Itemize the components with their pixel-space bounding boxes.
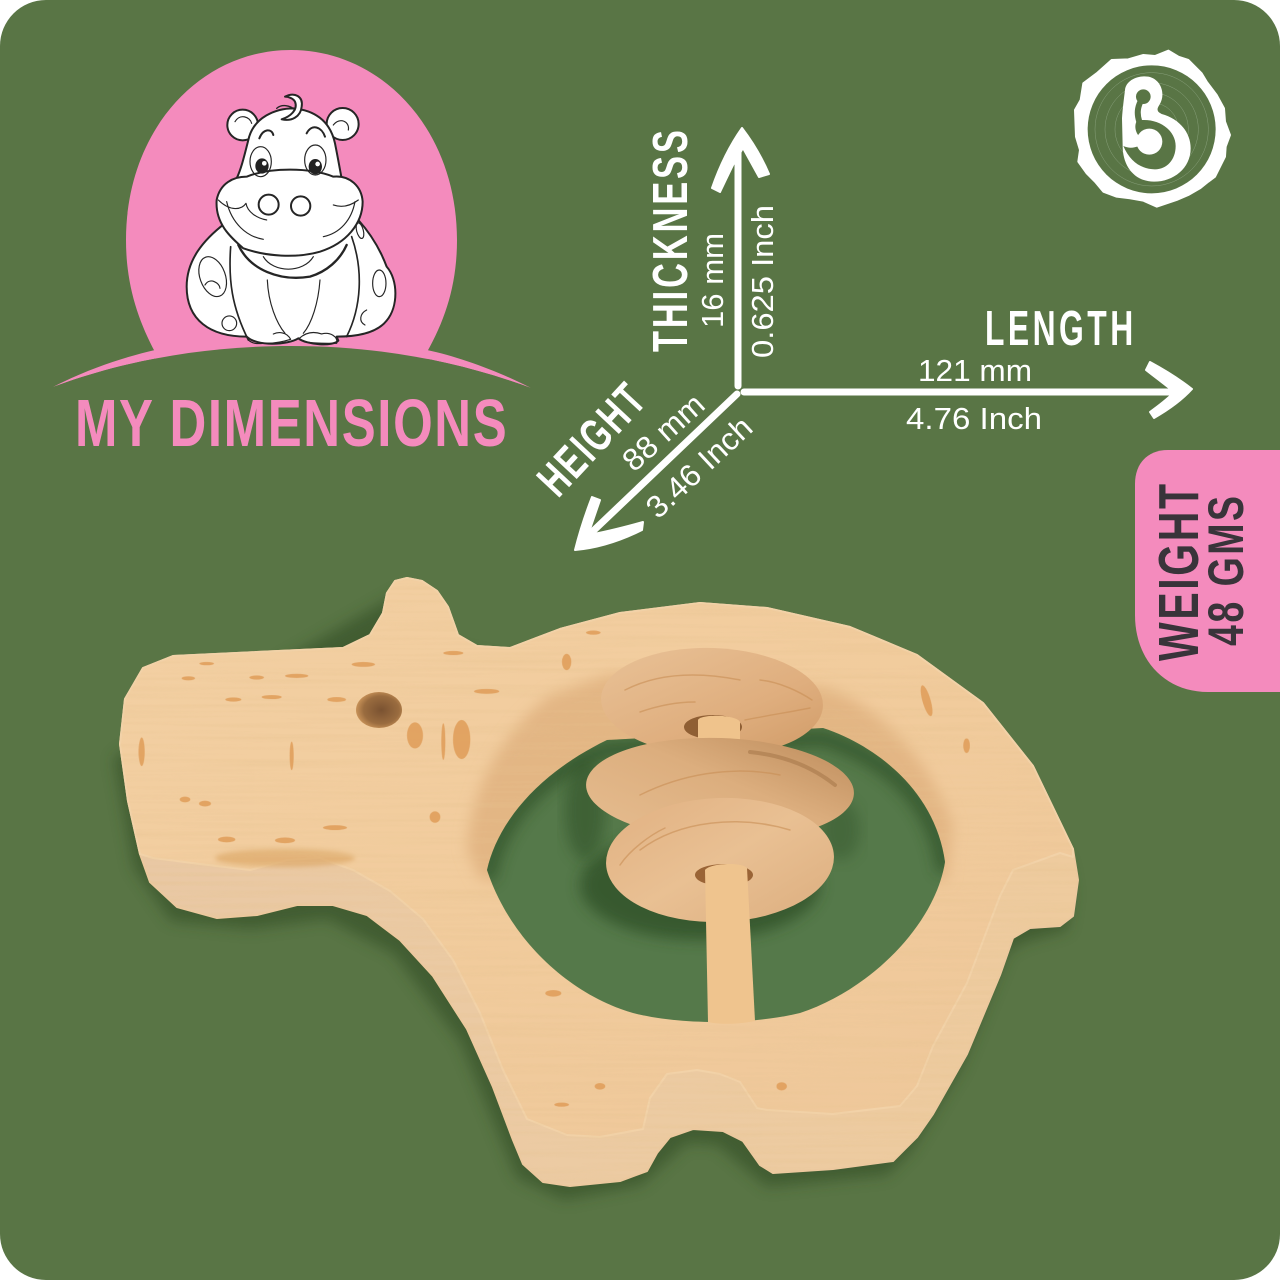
height mm: 88 mm <box>615 387 712 478</box>
upper rod stub <box>698 716 740 745</box>
logo <box>1075 51 1230 207</box>
length label: LENGTH <box>985 301 1133 356</box>
toy wide shadow <box>114 592 1072 1200</box>
green ground <box>53 346 531 394</box>
weight label: WEIGHT <box>1146 484 1211 661</box>
lower rod <box>705 864 755 1024</box>
thickness mm: 16 mm <box>695 233 730 328</box>
arrow: length <box>744 362 1192 418</box>
lower rod hole <box>695 864 753 886</box>
arrow: thickness <box>712 128 769 386</box>
top disc <box>599 644 825 760</box>
knot marks <box>139 631 970 1107</box>
disc shadow on backdrop <box>580 830 820 940</box>
eye hole <box>356 692 402 728</box>
inner wall shading <box>467 674 953 880</box>
toy top face <box>120 578 1073 1137</box>
hippo badge <box>53 50 531 394</box>
upper rod hole <box>684 715 742 739</box>
bottom disc <box>604 794 836 926</box>
toy silhouette and side wall <box>120 578 1078 1186</box>
ring opening <box>487 728 945 1022</box>
pink ground arc <box>53 346 531 388</box>
length inch: 4.76 Inch <box>906 401 1042 436</box>
weight tab <box>1135 450 1280 692</box>
weight value: 48 GMS <box>1199 496 1254 646</box>
wooden hippo rattle photo <box>100 560 1100 1200</box>
title: MY DIMENSIONS <box>75 385 507 461</box>
middle disc <box>584 733 856 845</box>
hippo illustration <box>187 95 395 344</box>
arrow: height <box>575 394 737 550</box>
height label: HEIGHT <box>527 374 656 506</box>
thickness inch: 0.625 Inch <box>745 205 780 358</box>
wood grain <box>100 560 1100 1200</box>
thickness label: THICKNESS <box>643 130 697 352</box>
length mm: 121 mm <box>918 353 1032 388</box>
cheek shading <box>214 669 956 883</box>
disc grain <box>620 675 835 865</box>
height inch: 3.46 Inch <box>639 409 759 525</box>
ring inner shadow <box>487 738 945 880</box>
axis arrows <box>575 128 1192 550</box>
